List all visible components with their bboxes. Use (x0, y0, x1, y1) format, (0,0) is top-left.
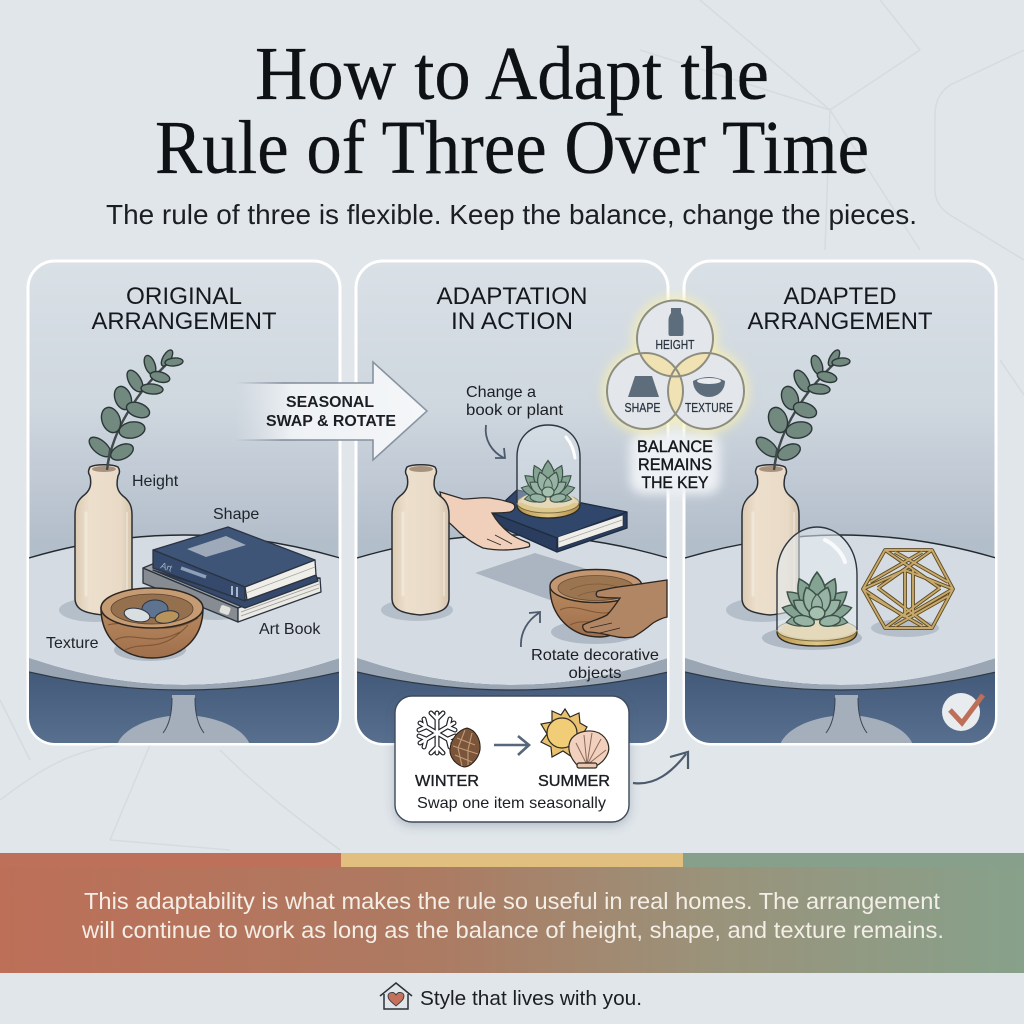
icon: sun (541, 709, 590, 757)
stacked art books: Art (159, 560, 174, 574)
arrow: seasonal swap and rotate: SWAP & ROTATE (266, 413, 396, 430)
subtitle: The rule of three is flexible. Keep the balance, change the pieces. (106, 199, 917, 230)
icon: house with heart (380, 983, 412, 1009)
banner text: This adaptability is what makes the rule so useful in real homes. The arrangement (84, 888, 940, 914)
annotation: change a book or plant: Change a (466, 384, 536, 401)
icon: snowflake (419, 713, 455, 753)
panel heading: IN ACTION (451, 308, 573, 335)
label: shape: SHAPE (624, 400, 661, 415)
icon: height bottle (668, 308, 684, 336)
stacked art books (143, 527, 321, 622)
banner text: will continue to work as long as the balance of height, shape, and texture remains. (81, 917, 944, 943)
footer (380, 983, 642, 1010)
icon: seashell (569, 731, 609, 768)
hand rotating the bowl (583, 580, 667, 638)
panel heading (436, 283, 588, 335)
label: height: HEIGHT (656, 337, 695, 352)
check badge (942, 693, 983, 731)
vase with eucalyptus branch (726, 348, 850, 622)
book with glass dome and succulent (492, 425, 627, 552)
label: shape: Shape (213, 506, 259, 523)
balance caption: THE KEY (642, 474, 708, 492)
label: texture: Texture (46, 635, 99, 652)
geometric brass object (863, 550, 953, 637)
panel: adaptation in action (356, 261, 668, 750)
annotation: change a book or plant: book or plant (466, 402, 564, 419)
balance caption (637, 438, 713, 492)
hand holding the book (440, 492, 530, 550)
wooden bowl (550, 570, 642, 637)
shadow of the book (475, 553, 590, 600)
panel: original arrangement (28, 261, 340, 750)
annotation: rotate decorative objects: objects (568, 665, 622, 682)
panel heading: ORIGINAL (126, 283, 242, 310)
banner (0, 853, 1024, 973)
label: winter: WINTER (415, 773, 479, 790)
panel heading: ARRANGEMENT (92, 308, 277, 335)
title (155, 32, 869, 190)
banner text (81, 888, 944, 943)
tagline: Style that lives with you. (420, 987, 642, 1010)
annotation: rotate decorative objects: Rotate decorative (531, 647, 659, 664)
balance caption: REMAINS (638, 456, 712, 474)
icon: pinecone (450, 728, 480, 767)
balance caption: BALANCE (637, 438, 713, 456)
label: summer: SUMMER (538, 773, 610, 790)
title: Rule of Three Over Time (155, 106, 869, 190)
caption: Swap one item seasonally (417, 795, 606, 812)
panel heading: ADAPTED (784, 283, 896, 310)
panel heading: ADAPTATION (436, 283, 588, 310)
label: art book: Art Book (259, 621, 321, 638)
color strip (0, 853, 1024, 867)
vase (392, 465, 449, 615)
panel: adapted arrangement (684, 261, 996, 750)
panel heading (92, 283, 277, 335)
arrow: seasonal swap and rotate: SEASONAL (286, 394, 374, 411)
arrow: callout to adapted arrangement (633, 752, 688, 783)
annotation: change a book or plant (466, 384, 564, 458)
icon: texture bowl (693, 377, 725, 397)
arrow: winter to summer (494, 736, 529, 755)
icon: shape trapezoid (628, 376, 659, 397)
panel heading (748, 283, 933, 335)
annotation: rotate decorative objects (521, 612, 659, 682)
panel heading: ARRANGEMENT (748, 308, 933, 335)
label: height: Height (132, 473, 179, 490)
callout: seasonal swap (395, 696, 629, 822)
balance diagram (604, 298, 747, 494)
title: How to Adapt the (255, 32, 769, 116)
arrow: seasonal swap and rotate (235, 362, 427, 460)
label: texture: TEXTURE (685, 400, 733, 415)
wooden bowl with stones (101, 588, 203, 661)
vase with eucalyptus branch (59, 348, 183, 622)
glass dome with succulent (762, 527, 862, 650)
